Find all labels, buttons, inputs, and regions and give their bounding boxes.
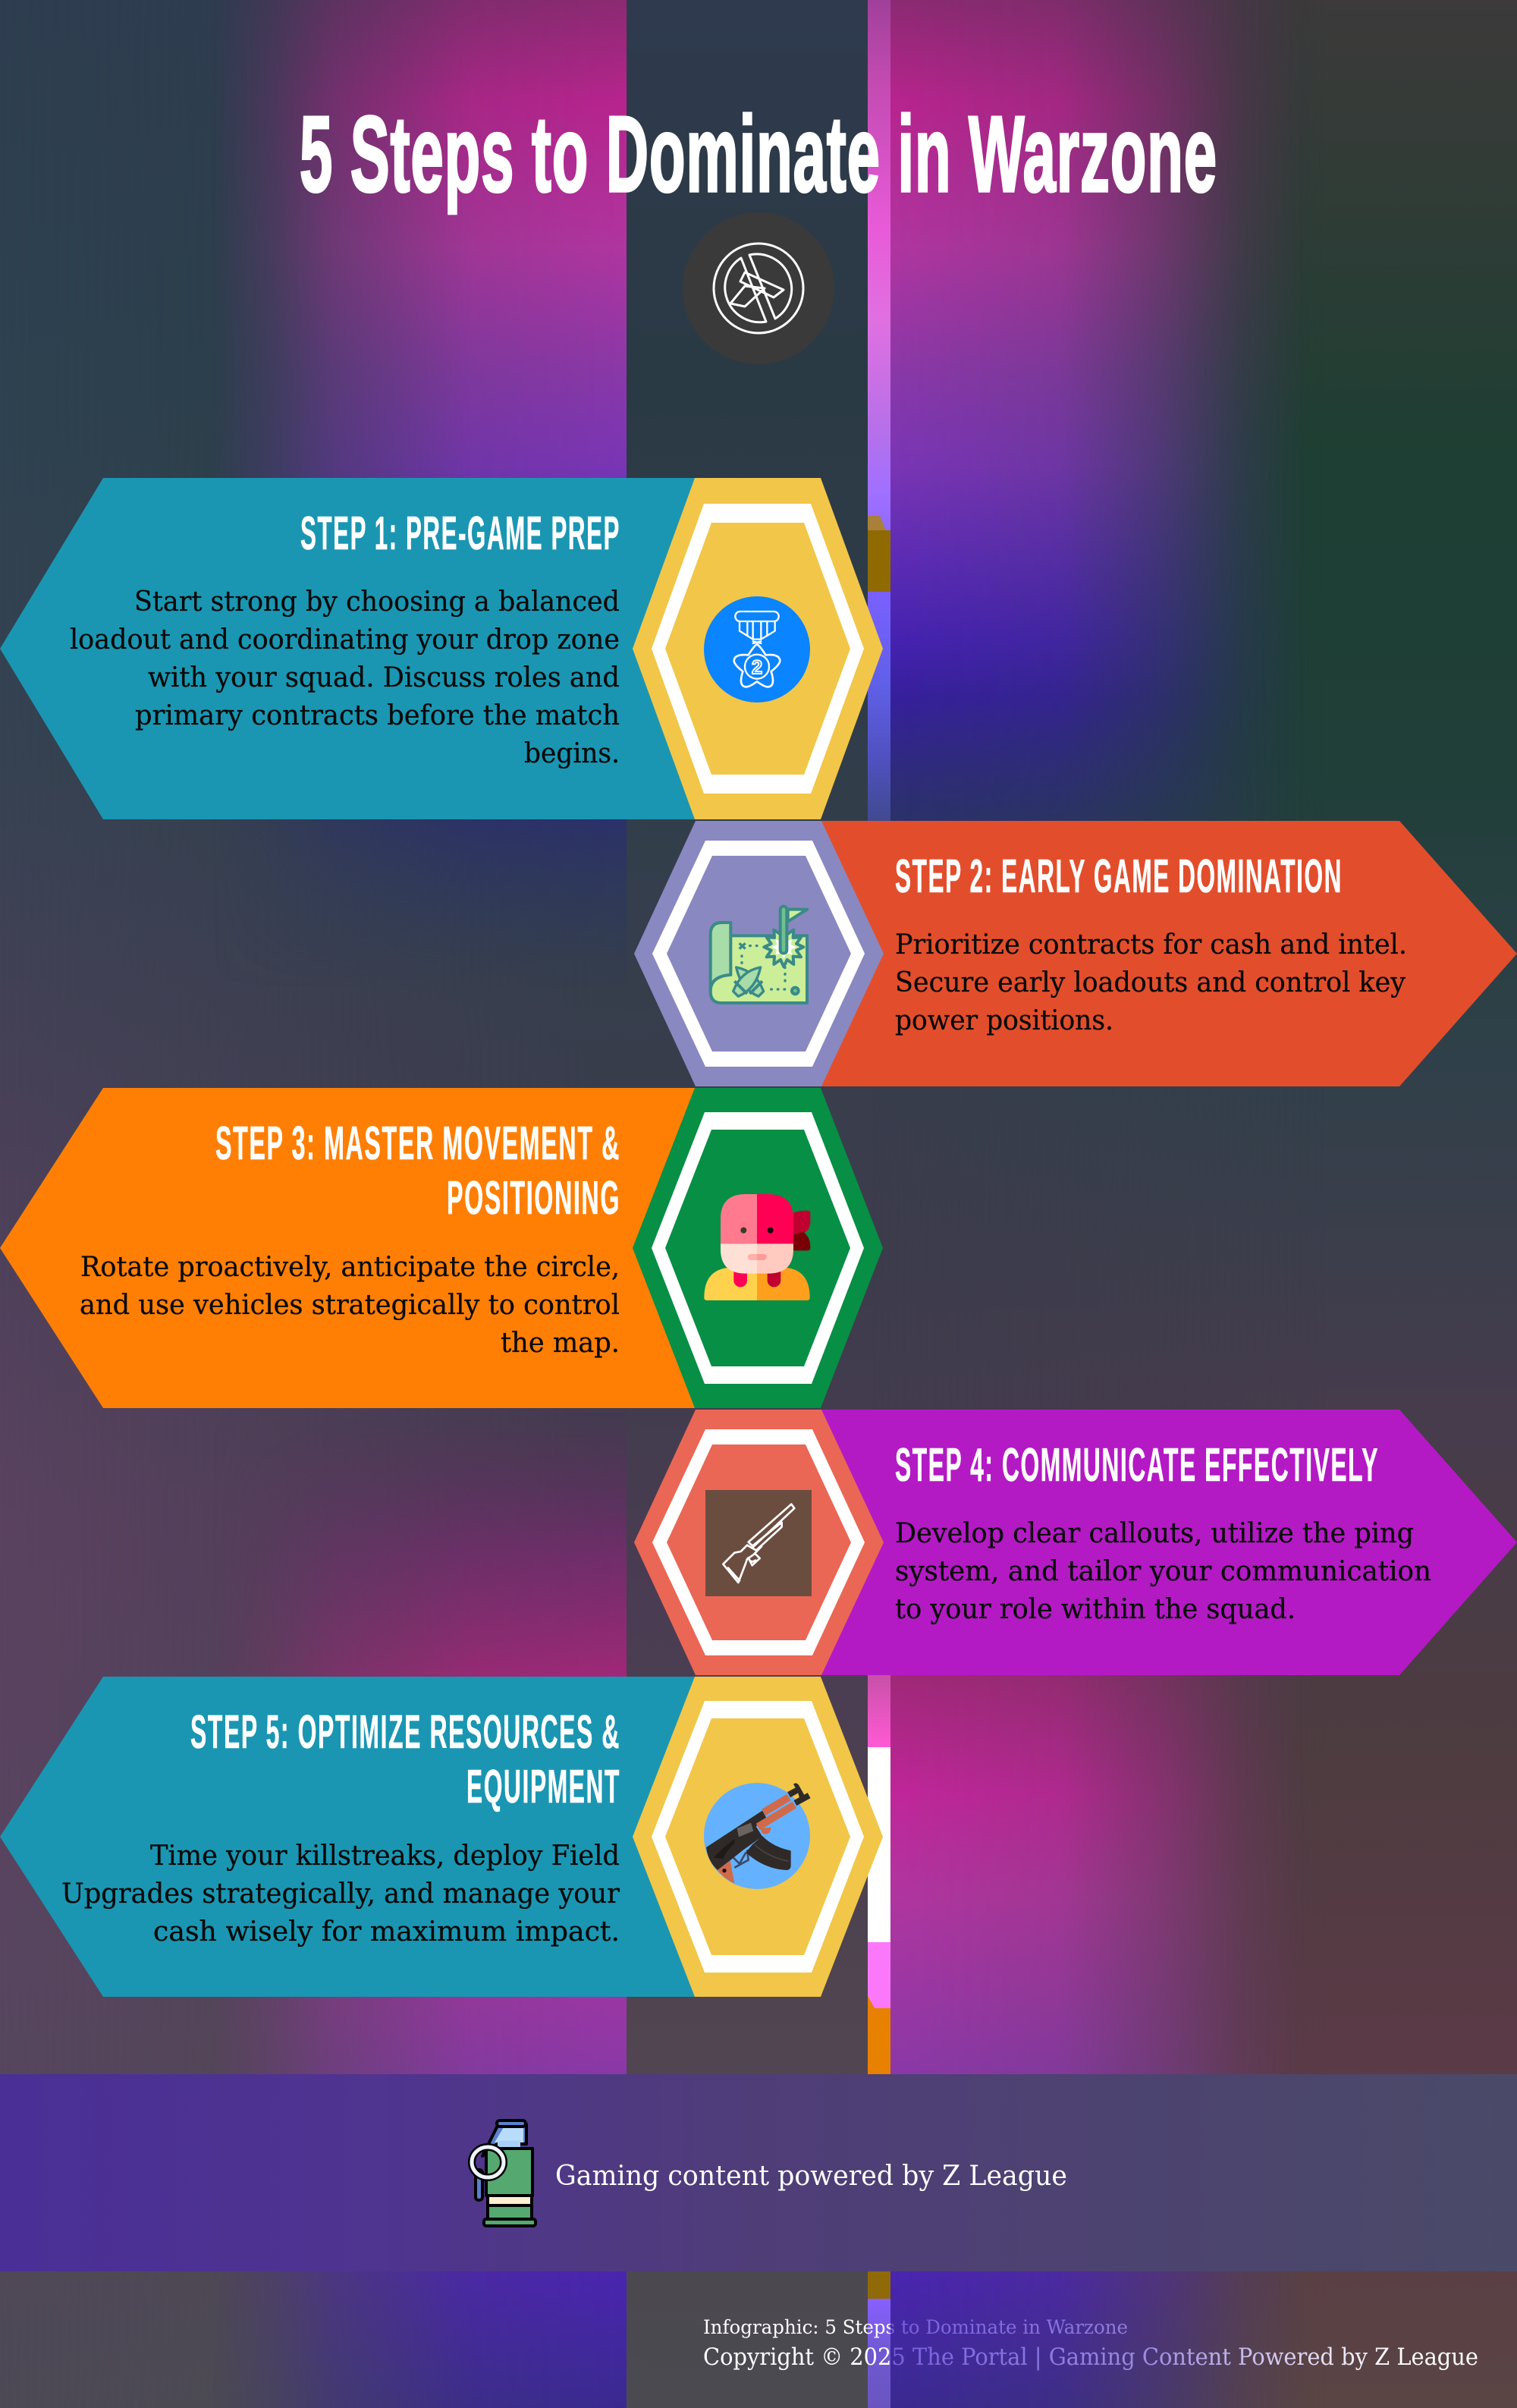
step 2 body: Prioritize contracts for cash and intel. [895,928,1407,960]
panel: step 4 [634,1410,1517,1675]
step 1 body: loadout and coordinating your drop zone [70,623,620,655]
step 3 heading: STEP 3: MASTER MOVEMENT & [215,1117,620,1170]
icon: assault rifle [704,1783,810,1889]
icon: soldier with bandana [704,1194,810,1300]
step 1 heading: STEP 1: PRE-GAME PREP [300,507,620,560]
step 4 body [895,1517,1431,1625]
step 3 hexagon [633,1088,883,1408]
step 1 body [70,585,620,769]
step 3 body: Rotate proactively, anticipate the circle, [80,1250,620,1283]
step 4 body: Develop clear callouts, utilize the ping [895,1517,1414,1549]
step 5 body [61,1839,620,1947]
icon: crossed-out pistol [683,212,834,364]
step 3 banner [0,1088,705,1408]
step 5 body: Upgrades strategically, and manage your [61,1877,620,1910]
panel: step 2 [634,821,1517,1086]
step 4 banner [812,1410,1517,1675]
step 1 body: primary contracts before the match [135,699,620,731]
step 2 hexagon [634,821,884,1086]
step 5 heading: EQUIPMENT [466,1760,620,1813]
step 1 body: begins. [524,737,620,769]
footer band [0,2074,1517,2271]
step 5 banner [0,1677,705,1997]
step 3 body: and use vehicles strategically to control [80,1288,620,1321]
panel: step 3 [0,1088,883,1408]
icon: grenade [472,2120,536,2226]
step 3 heading: POSITIONING [447,1171,620,1224]
copyright text [703,2316,1478,2371]
step 5 body: cash wisely for maximum impact. [153,1915,620,1947]
step 2 body: power positions. [895,1004,1113,1036]
step 1 body: with your squad. Discuss roles and [148,661,620,693]
vertical bright strip [868,0,890,2408]
copyright text: Infographic: 5 Steps to Dominate in Warzone [703,2316,1128,2338]
copyright text: Copyright © 2025 The Portal | Gaming Content Powered by Z League [703,2344,1478,2371]
panel: step 5 [0,1677,883,1997]
step 2 banner [812,821,1517,1086]
footer credit: Gaming content powered by Z League [555,2161,1067,2192]
icon: medal: 2 [752,657,762,678]
panel: step 1 [0,478,883,819]
step 3 body [80,1250,620,1359]
step 1 banner [0,478,705,819]
icon: shotgun [705,1490,812,1596]
step 2 body: Secure early loadouts and control key [895,966,1406,998]
step 4 body: system, and tailor your communication [895,1555,1431,1587]
step 3 body: the map. [501,1326,620,1359]
icon: battle map [711,907,807,1003]
step 5 hexagon [633,1677,883,1997]
step 5 body: Time your killstreaks, deploy Field [150,1839,620,1872]
step 5 heading [190,1705,620,1813]
step 1 body: Start strong by choosing a balanced [134,585,620,618]
step 1 hexagon [633,478,883,819]
step 4 body: to your role within the squad. [895,1592,1296,1625]
step 3 heading [215,1117,620,1224]
step 2 body [895,928,1407,1036]
step 5 heading: STEP 5: OPTIMIZE RESOURCES & [190,1705,620,1759]
step 4 hexagon [634,1410,884,1675]
icon: medal [704,596,810,703]
